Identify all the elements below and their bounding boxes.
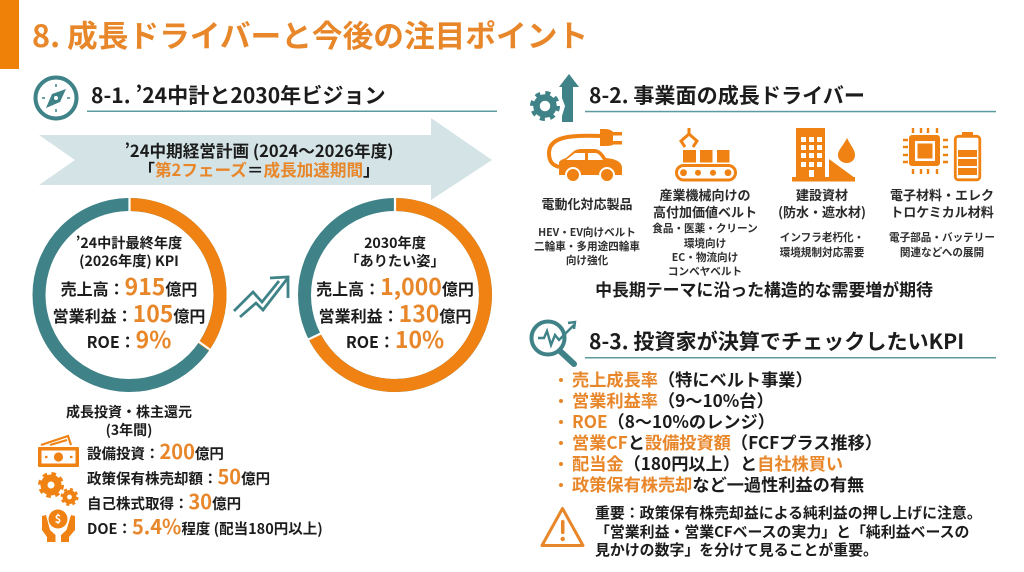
donut: 2026 KPI: ’24中計最終年度	[76, 233, 182, 253]
text: takeaway: 中長期テーマに沿った構造的な需要増が期待	[595, 276, 933, 301]
driver: industrial belts: 高付加価値ベルト	[653, 202, 757, 221]
driver: industrial belts	[652, 128, 758, 279]
driver: industrial belts: コンベヤベルト	[668, 264, 742, 279]
donut: 2030 vision: ROE：10%	[346, 321, 444, 355]
text block: growth investment heading: (3年間)	[106, 420, 152, 440]
icon: hands with coin	[42, 510, 75, 542]
list: KPIs: 売上成長率（特にベルト事業）	[572, 366, 813, 391]
callout: important note: 見かけの数字」を分けて見ることが重要。	[595, 539, 878, 560]
icon: building and water drop	[792, 128, 855, 182]
driver: electrification: 電動化対応製品	[541, 194, 633, 213]
driver: construction materials: (防水・遮水材)	[778, 202, 866, 221]
driver: electrification: 二輪車・多用途四輪車	[534, 239, 640, 254]
driver: construction materials: 建設資材	[796, 185, 848, 204]
icon: chip and battery	[903, 128, 980, 180]
donut: 2026 KPI: 営業利益：105億円	[53, 295, 205, 329]
heading 8-3: 8-3. 投資家が決算でチェックしたいKPI	[589, 326, 964, 356]
callout: important note: 「営業利益・営業CFベースの実力」と「純利益ベースの	[595, 521, 969, 542]
driver: industrial belts: 環境向け	[684, 236, 726, 251]
driver: industrial belts: 食品・医薬・クリーン	[652, 221, 758, 236]
driver: electronic materials: 電子材料・エレク	[890, 185, 994, 204]
icon: gear and up arrow	[532, 74, 579, 122]
driver: industrial belts: 産業機械向けの	[659, 185, 751, 204]
callout: important note	[595, 502, 982, 560]
driver: construction materials: インフラ老朽化・	[780, 230, 864, 245]
donut: 2030 vision: 営業利益：130億円	[319, 295, 471, 329]
donut: 2030 vision	[303, 196, 486, 386]
donut: 2026 KPI: (2026年度) KPI	[79, 251, 179, 271]
text: capex: 設備投資：200億円	[87, 436, 224, 465]
text block: growth investment heading: 成長投資・株主還元	[66, 402, 192, 422]
donut: 2030 vision: 売上高：1,000億円	[316, 268, 474, 302]
heading 8-1: 8-1. ’24中計と2030年ビジョン	[91, 80, 386, 110]
driver: electronic materials: 関連などへの展開	[900, 245, 984, 260]
driver: construction materials	[778, 128, 866, 260]
title: 8. 成長ドライバーと今後の注目ポイント	[32, 11, 588, 56]
list: KPIs: 政策保有株売却など一過性利益の有無	[572, 471, 864, 496]
icon: electric car	[549, 129, 622, 182]
arrow banner: mid-term plan	[39, 118, 492, 200]
driver: electronic materials: 電子部品・バッテリー	[889, 230, 995, 245]
driver: electrification	[534, 129, 640, 268]
arrow banner: mid-term plan: 「第2フェーズ＝成長加速期間」	[138, 157, 380, 181]
list: KPIs: 営業CFと設備投資額（FCFプラス推移）	[572, 429, 882, 454]
list: KPIs: 営業利益率（9～10%台）	[572, 387, 774, 412]
donut: 2026 KPI	[39, 196, 220, 386]
list: KPIs: 配当金（180円以上）と自社株買い	[572, 450, 843, 475]
text: DOE: DOE：5.4%程度 (配当180円以上)	[87, 511, 323, 540]
icon: money	[38, 436, 79, 467]
arrow banner: mid-term plan: ’24中期経営計画 (2024～2026年度)	[125, 138, 393, 162]
icon: rising arrow	[234, 277, 288, 317]
donut: 2026 KPI: ROE：9%	[87, 321, 171, 355]
header accent bar	[0, 0, 19, 69]
panel: 8-2 business growth drivers	[532, 74, 996, 301]
icon: conveyor with robot arm	[676, 128, 736, 180]
driver: industrial belts: EC・物流向け	[672, 250, 738, 265]
text: policy shareholding sale: 政策保有株売却額：50億円	[87, 461, 270, 490]
donut: 2030 vision: 2030年度	[364, 233, 426, 253]
icon: hands with coin: $	[55, 511, 61, 527]
donut: 2026 KPI: 売上高：915億円	[61, 268, 197, 302]
driver: electronic materials	[889, 128, 995, 260]
icon: warning triangle	[542, 508, 583, 546]
text: buyback: 自己株式取得：30億円	[87, 486, 241, 515]
panel: 8-1 mid-term plan and 2030 vision	[36, 78, 497, 542]
icon: compass	[36, 78, 76, 118]
callout: important note: 重要：政策保有株売却益による純利益の押し上げに注意。	[595, 502, 982, 523]
heading 8-2: 8-2. 事業面の成長ドライバー	[589, 80, 865, 110]
driver: construction materials: 環境規制対応需要	[780, 245, 865, 260]
panel: 8-3 investor KPIs	[532, 322, 996, 560]
driver: electrification: 向け強化	[566, 253, 609, 268]
text block: growth investment heading	[66, 402, 192, 440]
list: KPIs: ROE（8～10%のレンジ）	[572, 408, 775, 433]
icon: magnifier with chart	[532, 322, 575, 364]
driver: electrification: HEV・EV向けベルト	[538, 225, 636, 240]
icon: gears	[40, 474, 77, 505]
driver: electronic materials: トロケミカル材料	[890, 202, 994, 221]
donut: 2030 vision: 「ありたい姿」	[345, 251, 445, 271]
list: KPIs	[559, 366, 882, 496]
